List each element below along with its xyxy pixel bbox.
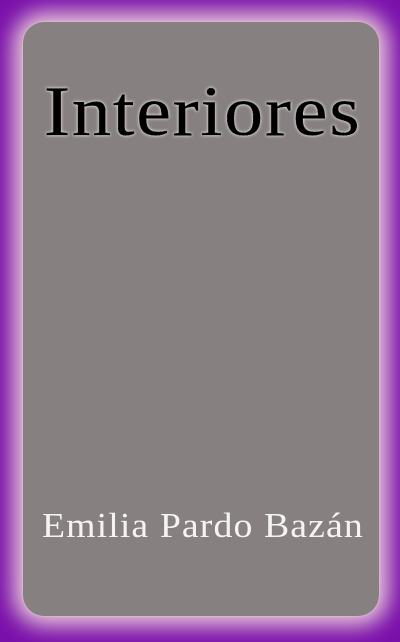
author: Emilia Pardo Bazán (42, 506, 363, 545)
title: Interiores (44, 72, 360, 151)
